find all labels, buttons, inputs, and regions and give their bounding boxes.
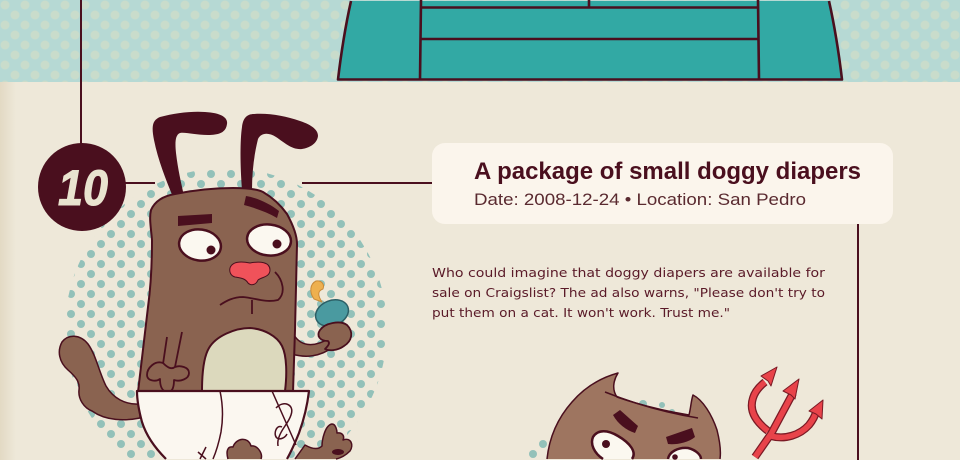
halftone dots behind devil — [529, 400, 675, 458]
date and location: Date: 2008-12-24 • Location: San Pedro — [474, 190, 806, 209]
right ear — [240, 114, 318, 190]
left eyebrow — [178, 214, 212, 226]
connector to title panel — [302, 182, 434, 184]
devil left brow — [613, 410, 638, 433]
description text: sale on Craigslist? The ad also warns, "Please don't try to — [432, 285, 825, 300]
devil brim line — [605, 392, 698, 418]
teal dotted band — [0, 0, 960, 82]
left foot mark — [198, 447, 206, 459]
devil right eye — [668, 448, 701, 460]
number badge 10 — [38, 143, 126, 231]
red nose — [230, 262, 270, 285]
connector left of dog — [124, 182, 155, 184]
title panel — [432, 143, 893, 224]
description text — [432, 265, 826, 320]
left ear — [153, 112, 227, 197]
teal striped structure — [338, 0, 842, 80]
halftone dotted circle behind dog — [65, 168, 387, 460]
item title: A package of small doggy diapers — [474, 158, 861, 185]
center foot — [227, 439, 261, 459]
devil right brow — [666, 428, 695, 444]
devil left eye — [592, 431, 634, 459]
pacifier nipple — [311, 281, 324, 302]
right foot — [295, 424, 352, 459]
description text: put them on a cat. It won't work. Trust me." — [432, 305, 730, 320]
right arm — [292, 335, 333, 356]
right eye — [246, 222, 292, 258]
vertical connector from previous item — [80, 0, 82, 150]
character: dog in diaper — [59, 112, 352, 459]
diaper — [137, 391, 309, 459]
vertical connector to next item — [857, 224, 859, 460]
left arm lines and hand — [147, 332, 189, 392]
belly — [202, 328, 286, 391]
number badge 10: 10 — [58, 160, 108, 216]
right eyebrow — [244, 196, 279, 218]
character: devil — [547, 373, 720, 460]
left eye — [177, 227, 223, 263]
tail — [59, 336, 140, 420]
right hand — [318, 323, 351, 350]
red trident — [752, 367, 823, 457]
devil head with horns — [547, 373, 720, 459]
body — [138, 188, 297, 392]
description text: Who could imagine that doggy diapers are available for — [432, 265, 826, 280]
muzzle line and mouth — [220, 272, 283, 314]
teal pacifier — [312, 295, 352, 331]
